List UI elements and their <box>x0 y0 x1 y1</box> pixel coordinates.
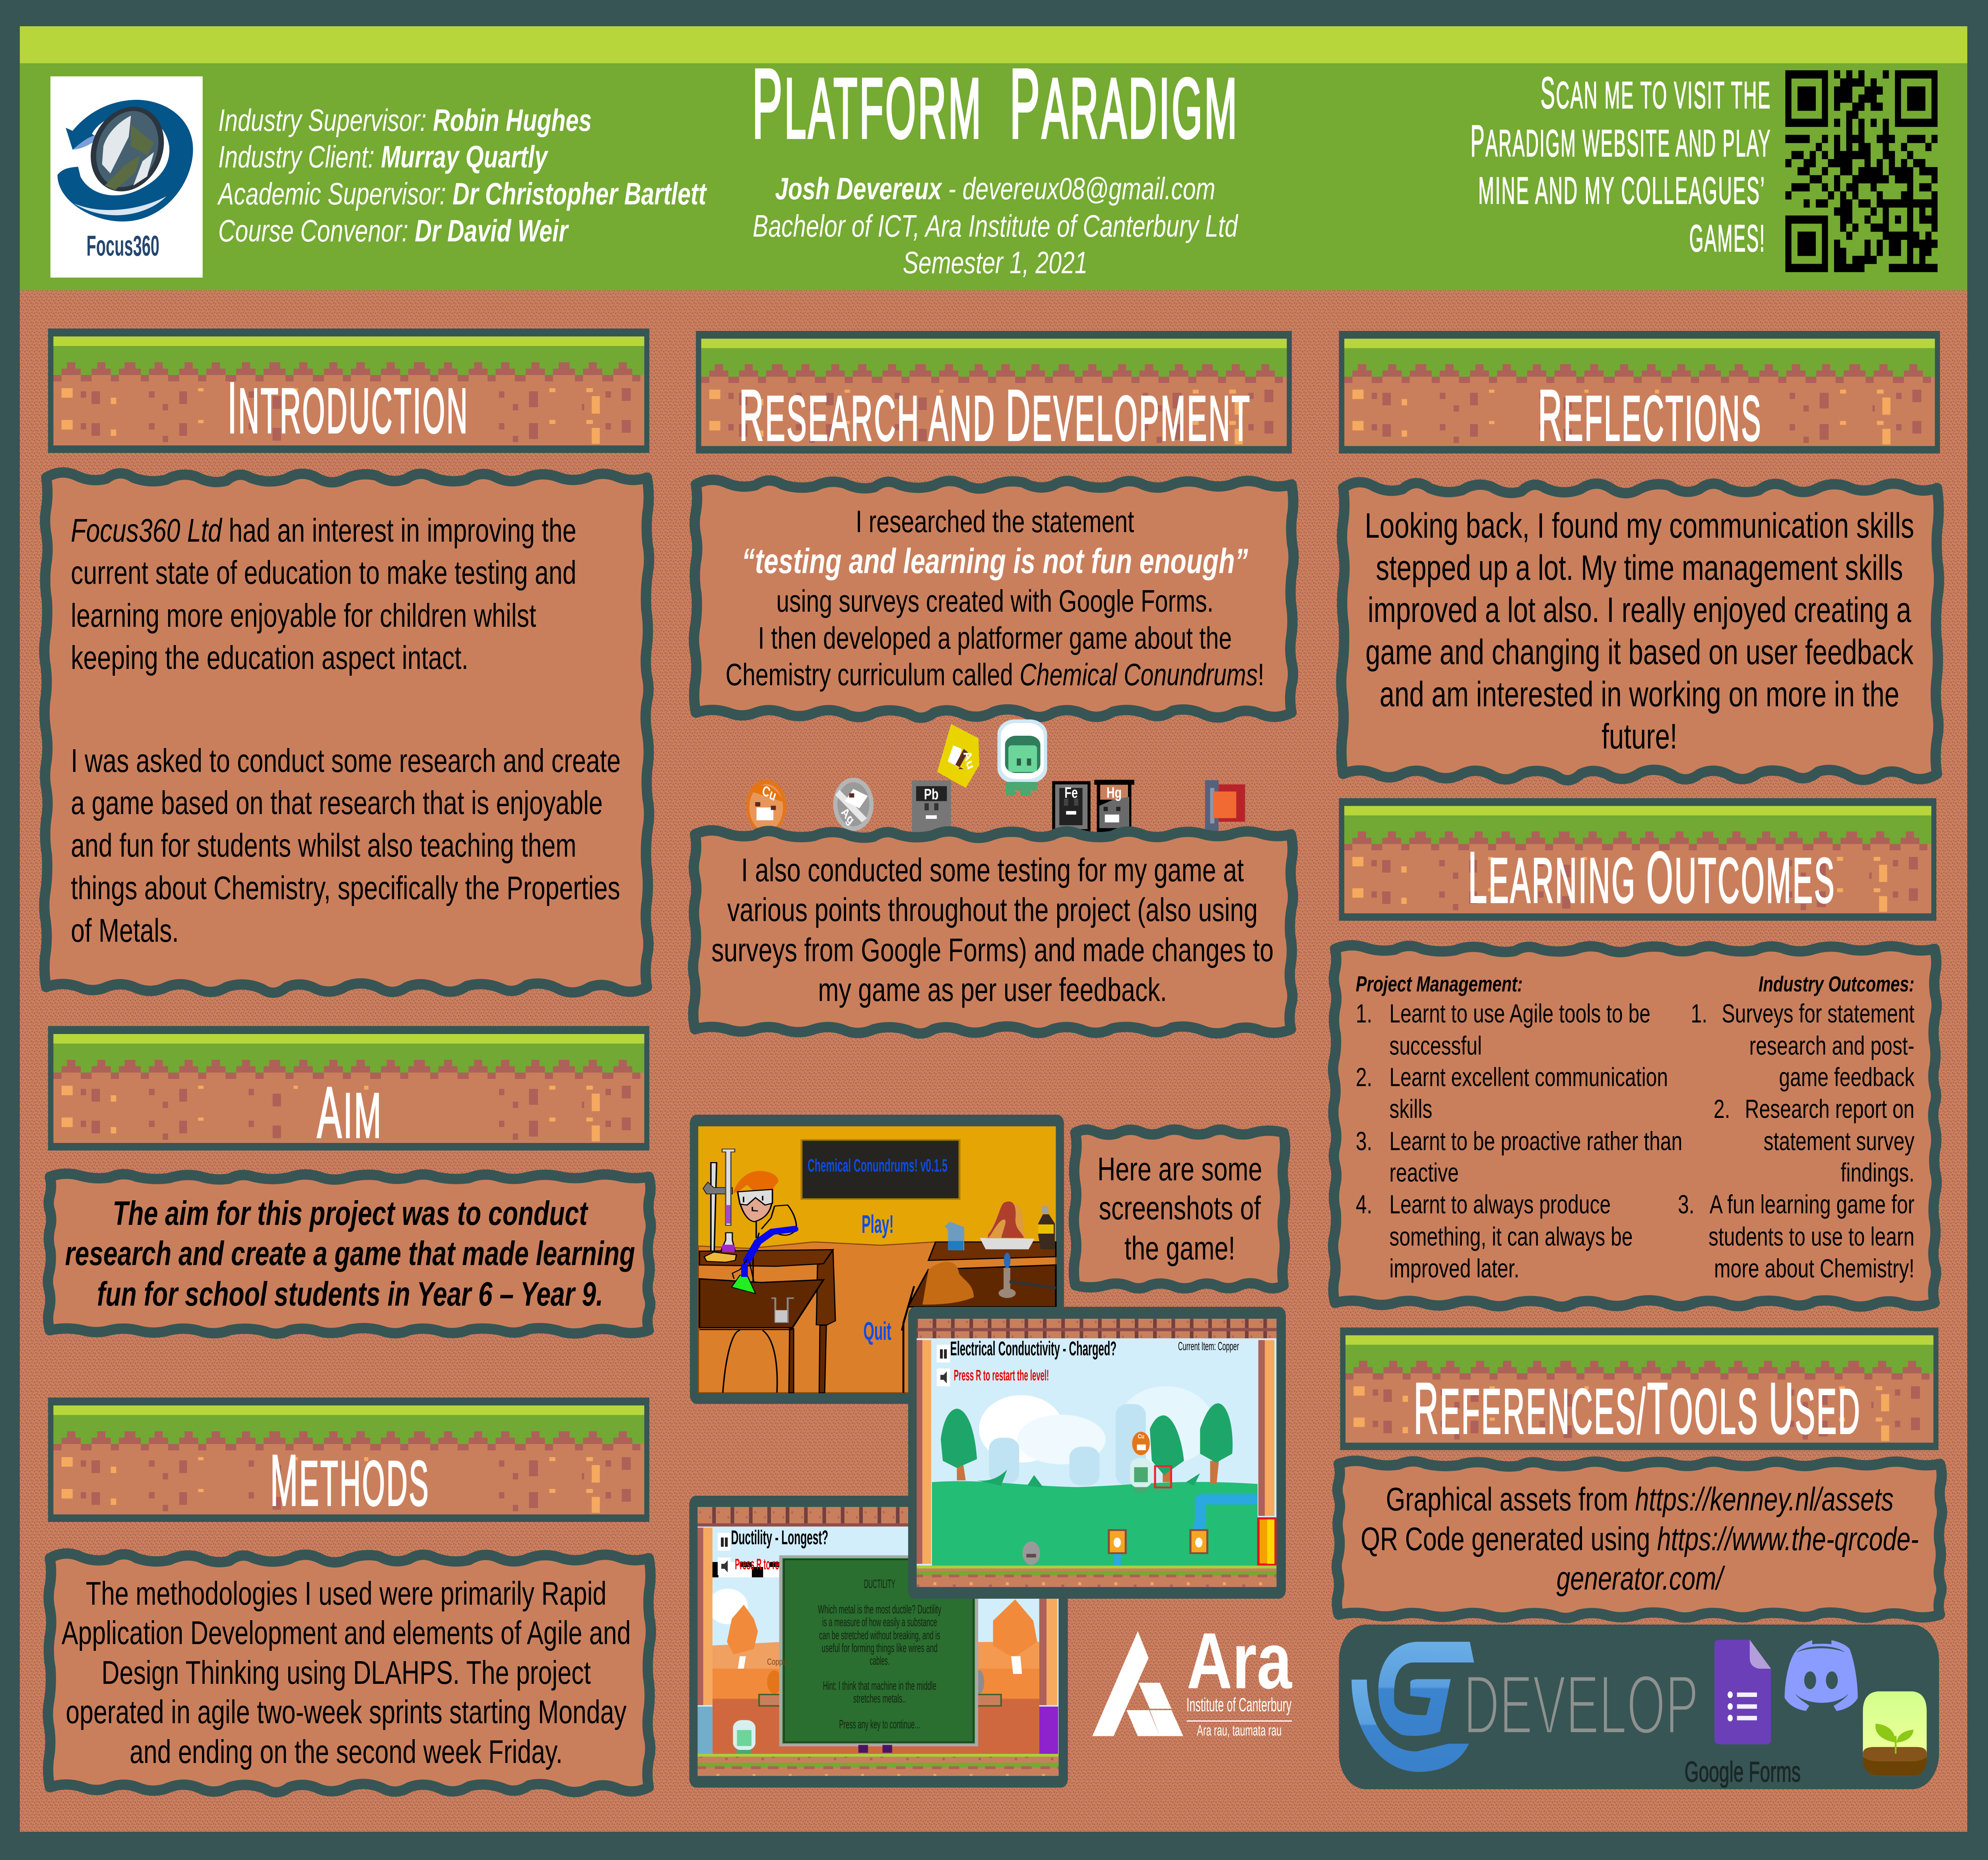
panel: introduction text: learning more enjoyable for children whilst <box>71 597 536 634</box>
header green band <box>20 63 1967 290</box>
text: project management list: reactive <box>1389 1158 1459 1188</box>
sprite labels: Fe <box>1064 785 1078 801</box>
banner: Reflections <box>1339 331 1940 456</box>
screenshot: ductility level <box>689 1496 1068 1788</box>
screenshot text <box>808 1156 947 1346</box>
panel: introduction text: of Metals. <box>71 912 179 949</box>
panel: testing text: I also conducted some testing for my game at <box>741 851 1244 888</box>
banner: Introduction <box>48 328 649 453</box>
text: industry outcomes list: A fun learning game for <box>1710 1190 1914 1219</box>
banner: Introduction: INTRODUCTION <box>227 367 469 449</box>
text: industry outcomes list: Industry Outcomes: <box>1759 972 1914 996</box>
logo: Ara Institute of Canterbury: Ara <box>1187 1616 1292 1705</box>
banner: Methods <box>48 1397 649 1522</box>
panel: methods text: Design Thinking using DLAHPS. The project <box>101 1654 591 1691</box>
screenshot text: Play! <box>862 1211 894 1239</box>
conductivity screen text: Press R to restart the level! <box>954 1367 1049 1384</box>
text: project management list: Project Management: <box>1356 972 1523 996</box>
text: project management list: improved later. <box>1389 1254 1519 1283</box>
supervisors text: Industry Client: Murray Quartly <box>218 139 549 174</box>
icon: GDevelop G <box>1351 1642 1474 1772</box>
sprite: flag <box>1205 780 1245 834</box>
panel: reflections text: Looking back, I found my communication skills <box>1365 506 1914 545</box>
panel: introduction text: Focus360 Ltd had an interest in improving the <box>71 511 577 549</box>
ductility screen text: stretches metals.. <box>853 1691 906 1705</box>
panel: screenshots caption: Here are some <box>1097 1150 1262 1188</box>
panel: tool logos <box>1339 1625 1939 1789</box>
text: industry outcomes list: findings. <box>1840 1158 1914 1188</box>
panel: screenshots caption: screenshots of <box>1099 1189 1261 1226</box>
text: industry outcomes list: students to use to learn <box>1708 1222 1914 1252</box>
panel: references text <box>1337 1461 1942 1618</box>
panel: introduction text: things about Chemistry, specifically the Properties <box>71 869 620 906</box>
banner: Learning Outcomes: LEARNING OUTCOMES <box>1468 837 1836 918</box>
banner: Research and Development: RESEARCH AND DEVELOPMENT <box>739 375 1251 456</box>
text: industry outcomes list: 2. <box>1714 1094 1730 1124</box>
panel: introduction text: current state of education to make testing and <box>71 554 577 591</box>
text: DEVELOP wordmark: DEVELOP <box>1464 1658 1699 1751</box>
panel: references text: generator.com/ <box>1557 1559 1725 1597</box>
text: industry outcomes list: 1. <box>1691 999 1707 1028</box>
banner: Reflections: REFLECTIONS <box>1538 375 1762 456</box>
icon: Forest app <box>1863 1691 1927 1776</box>
text: project management list: 2. <box>1356 1063 1372 1092</box>
screenshot: electrical conductivity level <box>908 1307 1286 1599</box>
banner: References / Tools Used <box>1340 1327 1938 1450</box>
panel: research statement: using surveys created with Google Forms. <box>776 583 1213 618</box>
panel: reflections text: game and changing it based on user feedback <box>1365 632 1914 672</box>
sprite: iron block <box>1052 781 1091 832</box>
text: project management list: skills <box>1389 1094 1432 1124</box>
panel: methods text: The methodologies I used were primarily Rapid <box>86 1574 606 1612</box>
text: project management list: Learnt excellent communication <box>1389 1063 1668 1092</box>
icon: Discord <box>1784 1640 1858 1711</box>
text: project management list: 1. <box>1356 999 1372 1028</box>
conductivity screen text: Cu <box>1138 1433 1144 1440</box>
panel: methods text <box>48 1553 651 1792</box>
panel: reflections text: improved a lot also. I really enjoyed creating a <box>1368 590 1911 630</box>
panel: research statement: I then developed a platformer game about the <box>758 620 1232 655</box>
text: project management list <box>1356 972 1682 1283</box>
supervisors text: Industry Supervisor: Robin Hughes <box>218 103 592 138</box>
ductility screen text: DUCTILITY <box>864 1577 895 1591</box>
panel: aim text: The aim for this project was to conduct <box>113 1194 588 1232</box>
game sprites row <box>746 719 1245 834</box>
panel: aim text: research and create a game that made learning <box>65 1234 635 1272</box>
supervisors text <box>217 103 707 248</box>
text: industry outcomes list: more about Chemistry! <box>1714 1254 1914 1283</box>
panel: screenshots caption <box>1074 1129 1285 1289</box>
panel: introduction text: keeping the education aspect intact. <box>71 639 468 676</box>
sprite: copper coin <box>746 779 786 833</box>
title: PLATFORM PARADIGM <box>752 48 1239 159</box>
panel: methods text: and ending on the second week Friday. <box>130 1733 563 1770</box>
ductility screen text: Press R to re <box>735 1556 779 1573</box>
logo: Ara Institute of Canterbury: Ara rau, taumata rau <box>1197 1722 1281 1739</box>
ductility screen text <box>731 1527 942 1731</box>
panel: research statement <box>694 480 1294 718</box>
sprite: mercury block <box>1094 780 1134 832</box>
sprite labels: Pb <box>924 786 939 803</box>
text: project management list: Learnt to be proactive rather than <box>1389 1127 1682 1156</box>
ductility screen text: is a measure of how easily a substance <box>822 1615 937 1629</box>
QR prompt text: SCAN ME TO VISIT THE <box>1540 68 1771 118</box>
text: project management list: successful <box>1389 1031 1482 1061</box>
panel: testing text <box>693 830 1293 1034</box>
text: industry outcomes list <box>1678 972 1915 1283</box>
panel: references text: QR Code generated using https://www.the-qrcode- <box>1361 1520 1919 1557</box>
panel: references text: Graphical assets from https://kenney.nl/assets <box>1386 1480 1894 1518</box>
QR prompt text: GAMES! <box>1689 217 1766 260</box>
screenshot text: Quit <box>864 1318 891 1346</box>
author details: Semester 1, 2021 <box>903 245 1087 280</box>
QR prompt text: PARADIGM WEBSITE AND PLAY <box>1470 117 1771 166</box>
panel: reflections text: stepped up a lot. My time management skills <box>1376 548 1903 587</box>
panel: methods text: Application Development and elements of Agile and <box>62 1614 631 1651</box>
author details: Josh Devereux - devereux08@gmail.com <box>775 171 1215 206</box>
panel: reflections text: and am interested in working on more in the <box>1380 674 1899 714</box>
ductility screen text: cables. <box>870 1654 889 1668</box>
logo: Ara Institute of Canterbury: Institute of Canterbury <box>1186 1695 1292 1716</box>
panel: introduction text: I was asked to conduct some research and create <box>71 742 621 779</box>
icon: Google Forms document <box>1714 1640 1771 1744</box>
logo: Focus360: Focus360 <box>86 230 159 262</box>
screenshot: title screen <box>690 1115 1064 1404</box>
QR prompt text <box>1470 68 1771 260</box>
banner: Aim <box>48 1026 649 1153</box>
author details <box>753 171 1239 280</box>
text: project management list: 4. <box>1356 1190 1372 1219</box>
screenshot text: Chemical Conundrums! v0.1.5 <box>808 1156 947 1176</box>
sprite labels: Hg <box>1107 785 1122 801</box>
text: project management list: Learnt to always produce <box>1389 1190 1611 1219</box>
supervisors text: Academic Supervisor: Dr Christopher Bartlett <box>217 176 707 211</box>
ductility screen text: Which metal is the most ductile? Ductility <box>818 1602 942 1616</box>
banner: Methods: METHODS <box>270 1440 430 1521</box>
panel: learning outcomes <box>1333 945 1937 1307</box>
text: Google Forms wordmark: Google Forms <box>1685 1756 1801 1788</box>
sprite labels: Au <box>961 748 977 772</box>
panel: reflections text: future! <box>1602 717 1677 756</box>
ductility screen text: Press any key to continue... <box>839 1717 920 1731</box>
QR prompt text: MINE AND MY COLLEAGUES’ <box>1478 169 1766 212</box>
text: industry outcomes list: Research report on <box>1745 1094 1914 1124</box>
supervisors text: Course Convenor: Dr David Weir <box>218 213 569 248</box>
panel: testing text: my game as per user feedback. <box>818 971 1167 1008</box>
sprite labels <box>760 748 1122 828</box>
banner: Research and Development <box>696 331 1292 456</box>
ductility screen text: can be stretched without breaking, and is <box>819 1628 940 1642</box>
panel: introduction text <box>44 472 649 993</box>
header light grass strip <box>20 26 1967 63</box>
sprite: silver coin <box>833 777 874 831</box>
header band <box>20 26 1967 290</box>
text: industry outcomes list: game feedback <box>1779 1063 1915 1092</box>
sprite labels: Cu <box>760 782 778 804</box>
panel: research statement: Chemistry curriculum called Chemical Conundrums! <box>726 657 1264 692</box>
conductivity screen text: Electrical Conductivity - Charged? <box>950 1338 1116 1360</box>
logo: Ara Institute of Canterbury <box>1092 1616 1292 1739</box>
QR code <box>1785 74 1938 268</box>
banner: References / Tools Used: REFERENCES/TOOLS USED <box>1414 1368 1861 1449</box>
ductility screen text: Ductility - Longest? <box>731 1527 828 1549</box>
text: industry outcomes list: Surveys for statement <box>1722 999 1914 1028</box>
banner: Learning Outcomes <box>1339 798 1936 921</box>
text: industry outcomes list: statement survey <box>1764 1127 1915 1156</box>
panel: reflections text <box>1341 482 1939 780</box>
sprite: gold block <box>937 724 979 788</box>
panel: introduction text: a game based on that research that is enjoyable <box>71 784 603 821</box>
ductility screen text: Coppe <box>767 1657 786 1667</box>
panel: methods text: operated in agile two-week sprints starting Monday <box>66 1693 627 1730</box>
text: industry outcomes list: research and post- <box>1749 1031 1914 1061</box>
panel: research statement: I researched the statement <box>856 504 1134 539</box>
banner: Aim: AIM <box>317 1072 383 1153</box>
sprite: lead block <box>912 781 951 834</box>
panel: introduction text: and fun for students whilst also teaching them <box>71 826 577 864</box>
conductivity screen text: Current Item: Copper <box>1178 1339 1239 1353</box>
conductivity screen text <box>950 1338 1239 1440</box>
logo: Focus360 <box>50 76 203 278</box>
panel: aim text: fun for school students in Year 6 – Year 9. <box>97 1275 603 1313</box>
sprite: astronaut player <box>998 719 1047 795</box>
panel: research statement: “testing and learning is not fun enough” <box>742 541 1248 581</box>
text: industry outcomes list: 3. <box>1678 1190 1695 1219</box>
text: project management list: Learnt to use Agile tools to be <box>1389 999 1650 1028</box>
text: project management list: 3. <box>1356 1127 1372 1156</box>
panel: aim text <box>48 1174 651 1334</box>
text: project management list: something, it can always be <box>1389 1222 1633 1252</box>
panel: screenshots caption: the game! <box>1124 1229 1235 1267</box>
ductility screen text: Hint: I think that machine in the middle <box>823 1679 936 1693</box>
panel: testing text: surveys from Google Forms) and made changes to <box>711 931 1274 968</box>
author details: Bachelor of ICT, Ara Institute of Canterbury Ltd <box>753 208 1239 243</box>
panel: testing text: various points throughout the project (also using <box>727 891 1258 928</box>
ductility screen text: useful for forming things like wires and <box>822 1641 938 1655</box>
sprite labels: Ag <box>839 805 856 828</box>
